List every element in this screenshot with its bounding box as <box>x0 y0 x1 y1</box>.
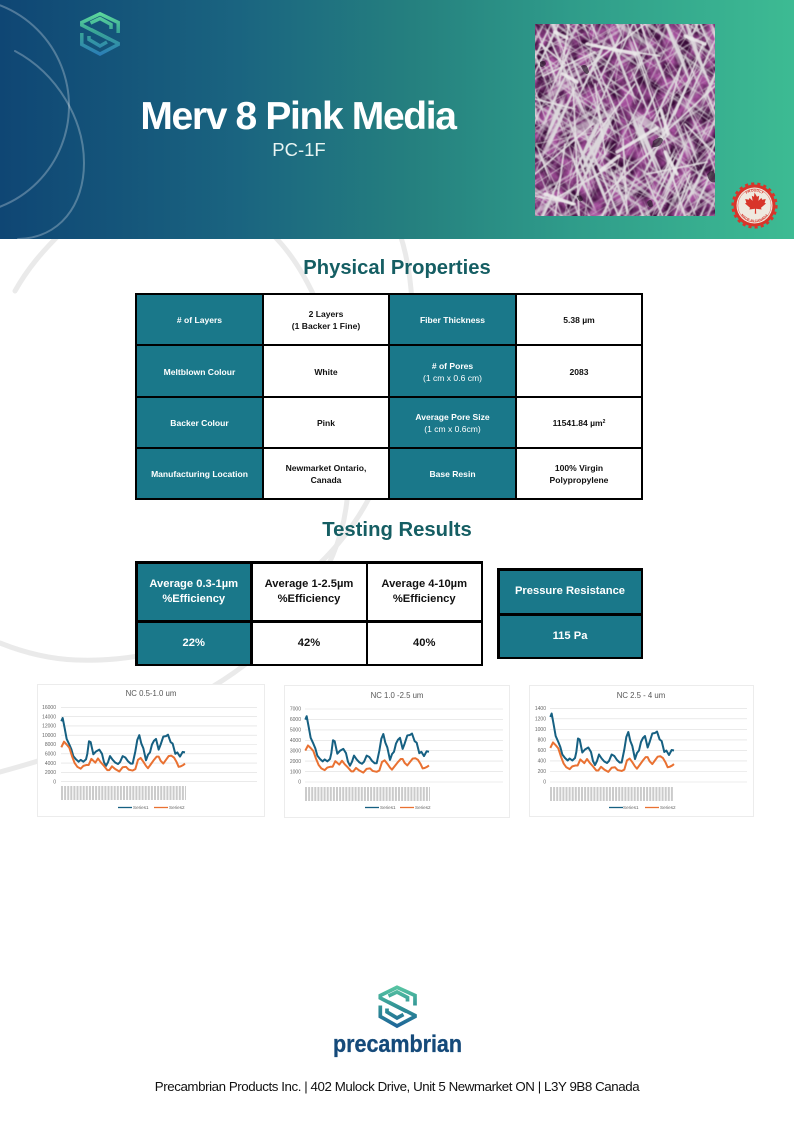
cell: 4-10 micron value <box>368 622 480 664</box>
chart: NC 0.5-1.0 um: 12000 <box>42 724 56 730</box>
cell: average pore size label: Average Pore Size <box>415 412 490 422</box>
cell: meltblown colour label <box>137 346 262 396</box>
heading: physical properties: Physical Properties <box>303 257 491 279</box>
cell: manufacturing location value: Canada <box>311 475 341 485</box>
cell: average pore size label: (1 cm x 0.6cm) <box>424 424 481 434</box>
cell: 4-10 micron heading <box>368 564 480 620</box>
cell: base resin label: Base Resin <box>429 469 476 479</box>
chart: NC 1.0-2.5 um: 3000 <box>290 748 301 754</box>
table: physical properties <box>135 293 643 500</box>
chart: NC 0.5-1.0 um: NC 0.5-1.0 um <box>126 689 176 698</box>
chart: NC 0.5-1.0 um: 10000 <box>42 733 56 739</box>
cell: meltblown colour value: White <box>314 366 338 376</box>
chart: NC 2.5-4 um: NC 2.5 - 4 um <box>617 691 665 700</box>
cell: 0.3-1 micron value: 22% <box>183 636 205 648</box>
cell: 0.3-1 micron heading <box>138 564 250 620</box>
chart: NC 2.5-4 um: 0 <box>543 780 546 786</box>
chart: NC 1.0-2.5 um: NC 1.0 -2.5 um <box>371 691 423 700</box>
cell: base resin value: Polypropylene <box>550 475 608 485</box>
cell: average pore size value <box>517 398 641 447</box>
cell: number of layers value <box>264 295 388 344</box>
chart: NC 1.0-2.5 um: 7000 <box>290 707 301 713</box>
chart: NC 0.5-1.0 um: Series2 <box>169 805 185 810</box>
cell: backer colour value <box>264 398 388 447</box>
chart: NC 2.5-4 um: 1000 <box>535 727 546 733</box>
footer address: Precambrian Products Inc. | 402 Mulock Drive, Unit 5 Newmarket ON | L3Y 9B8 Canada <box>155 1079 639 1094</box>
chart: NC 0.5-1.0 um: 4000 <box>45 761 56 767</box>
cell: pressure resistance heading <box>500 570 640 613</box>
cell: base resin value: 100% Virgin <box>555 463 603 473</box>
cell: base resin label <box>390 449 515 498</box>
cell: meltblown colour value <box>264 346 388 396</box>
cell: number of pores label <box>390 346 515 396</box>
cell: backer colour label: Backer Colour <box>170 418 229 428</box>
cell: 1-2.5 micron value: 42% <box>298 636 320 648</box>
header line arcs <box>0 4 85 239</box>
subtitle: PC-1F <box>272 139 326 160</box>
cell: fiber thickness label: Fiber Thickness <box>420 315 485 325</box>
chart: NC 1.0-2.5 um: 1000 <box>290 769 301 775</box>
cell: 0.3-1 micron heading: Average 0.3-1µm <box>149 578 238 590</box>
cell: fiber thickness value: 5.38 µm <box>563 315 595 325</box>
charts row <box>37 684 754 818</box>
chart: NC 2.5-4 um: Series1 <box>623 805 639 810</box>
cell: number of pores label: # of Pores <box>432 360 473 370</box>
cell: base resin value <box>517 449 641 498</box>
chart: NC 2.5-4 um: Series2 <box>660 805 676 810</box>
chart: NC 2.5-4 um: 1400 <box>535 706 546 712</box>
chart: NC 0.5-1.0 um: 8000 <box>45 742 56 748</box>
media microscope photo <box>535 24 715 216</box>
cell: 1-2.5 micron value <box>252 622 366 664</box>
chart: NC 1.0-2.5 um: 6000 <box>290 717 301 723</box>
cell: backer colour label <box>137 398 262 447</box>
cell: number of pores value <box>517 346 641 396</box>
cell: pressure resistance value <box>500 616 640 656</box>
cell: number of layers label: # of Layers <box>177 315 222 325</box>
cell: average pore size value: 11541.84 µm2 <box>553 418 605 428</box>
cell: pressure resistance heading: Pressure Resistance <box>515 585 625 597</box>
cell: 1-2.5 micron heading <box>252 564 366 620</box>
chart: NC 1.0-2.5 um <box>284 686 510 818</box>
cell: manufacturing location label <box>137 449 262 498</box>
cell: number of pores value: 2083 <box>569 366 588 376</box>
chart: NC 1.0-2.5 um: 2000 <box>290 759 301 765</box>
chart: NC 2.5-4 um: 600 <box>538 748 546 754</box>
cell: average pore size label <box>390 398 515 447</box>
cell: 0.3-1 micron value <box>138 622 250 664</box>
chart: NC 0.5-1.0 um: 2000 <box>45 770 56 776</box>
cell: pressure resistance value: 115 Pa <box>553 630 587 642</box>
chart: NC 0.5-1.0 um: 0 <box>53 779 56 785</box>
badge: made in canada <box>731 182 778 229</box>
cell: manufacturing location value: Newmarket Ontario, <box>286 463 366 473</box>
icon: hexagon mark <box>380 987 415 1026</box>
table: pressure resistance <box>497 568 643 659</box>
cell: 4-10 micron heading: %Efficiency <box>393 593 456 605</box>
cell: backer colour value: Pink <box>317 418 335 428</box>
footer logo <box>333 985 462 1058</box>
chart: NC 1.0-2.5 um: Series2 <box>415 805 431 810</box>
icon: top logo <box>80 12 120 56</box>
chart: NC 1.0-2.5 um: 0 <box>298 780 301 786</box>
chart: NC 2.5-4 um: 200 <box>538 769 546 775</box>
chart: NC 1.0-2.5 um: 4000 <box>290 738 301 744</box>
cell: number of layers label <box>137 295 262 344</box>
chart: NC 2.5-4 um: 1200 <box>535 716 546 722</box>
badge: made in canada: MADE IN CANADA <box>741 214 768 222</box>
cell: 0.3-1 micron heading: %Efficiency <box>162 593 225 605</box>
cell: fiber thickness value <box>517 295 641 344</box>
chart: NC 1.0-2.5 um: Series1 <box>380 805 396 810</box>
chart: NC 0.5-1.0 um: 6000 <box>45 752 56 758</box>
cell: manufacturing location label: Manufacturing Location <box>151 469 248 479</box>
cell: manufacturing location value <box>264 449 388 498</box>
cell: 4-10 micron value: 40% <box>413 636 435 648</box>
header banner <box>0 0 794 239</box>
chart: NC 1.0-2.5 um: 5000 <box>290 728 301 734</box>
chart: NC 0.5-1.0 um: Series1 <box>133 805 149 810</box>
chart: NC 2.5-4 um: 400 <box>538 759 546 765</box>
heading: testing results: Testing Results <box>322 519 472 541</box>
cell: meltblown colour label: Meltblown Colour <box>164 366 235 376</box>
cell: 1-2.5 micron heading: %Efficiency <box>278 593 340 605</box>
title: Merv 8 Pink Media <box>140 95 456 138</box>
cell: fiber thickness label <box>390 295 515 344</box>
badge: made in canada: PROUDLY <box>745 189 764 194</box>
chart: NC 2.5-4 um: 800 <box>538 738 546 744</box>
chart: NC 0.5-1.0 um: 16000 <box>42 705 56 711</box>
cell: 4-10 micron heading: Average 4-10µm <box>381 578 467 590</box>
cell: 1-2.5 micron heading: Average 1-2.5µm <box>265 578 353 590</box>
table: efficiency results <box>135 561 483 666</box>
chart: NC 2.5-4 um <box>530 686 754 816</box>
cell: number of pores label: (1 cm x 0.6 cm) <box>423 372 482 382</box>
cell: number of layers value: 2 Layers <box>309 309 343 319</box>
chart: NC 0.5-1.0 um <box>38 684 264 816</box>
cell: number of layers value: (1 Backer 1 Fine) <box>292 321 360 331</box>
chart: NC 0.5-1.0 um: 14000 <box>42 714 56 720</box>
